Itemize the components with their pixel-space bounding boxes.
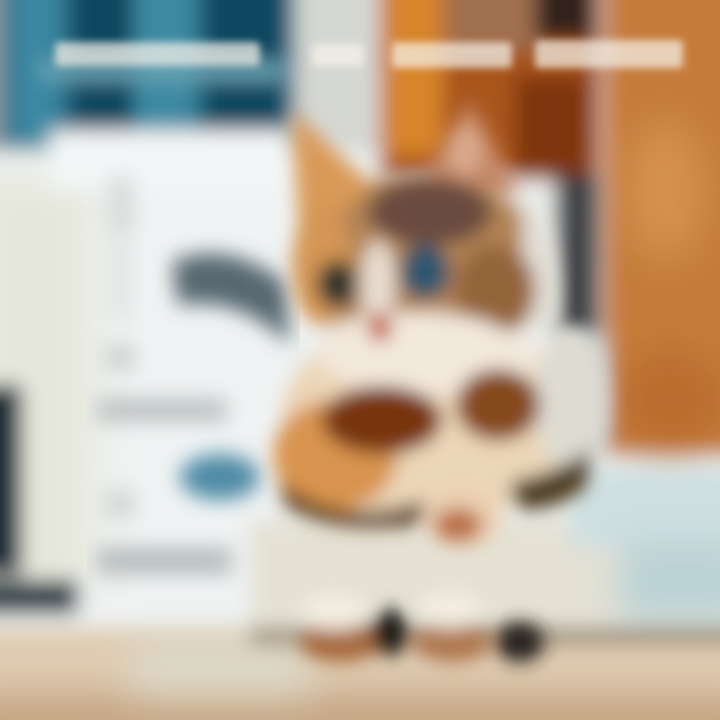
cat illustration <box>273 100 606 662</box>
floor <box>0 628 720 720</box>
nose <box>368 312 392 342</box>
brown chest patch left <box>322 386 442 454</box>
left face orange <box>292 205 352 325</box>
brown chest patch right <box>456 369 540 441</box>
left eye <box>317 260 357 308</box>
orange and brown curtain <box>380 0 600 180</box>
white bedding left <box>0 160 300 620</box>
muzzle white <box>320 312 510 368</box>
pale curtain strip <box>295 0 380 150</box>
blurred text lines <box>97 175 232 575</box>
right eye <box>400 245 450 299</box>
dark strip right of cat <box>555 175 600 335</box>
left ear <box>292 110 372 250</box>
icon: blue blob lower <box>180 454 260 500</box>
cat body <box>280 320 580 520</box>
head <box>295 175 545 355</box>
left hind foot <box>300 622 380 662</box>
wooden panel right <box>604 0 720 455</box>
dark belly stripe left <box>278 480 425 527</box>
forehead dark <box>368 178 492 246</box>
right hind foot <box>414 622 490 662</box>
right face brown <box>455 245 535 335</box>
blue check curtain <box>0 0 295 150</box>
front paw <box>425 488 501 548</box>
white right cheek fur <box>522 190 558 330</box>
left haunch orange <box>273 400 397 510</box>
right white fur <box>534 330 606 470</box>
blurred text panel <box>97 175 290 575</box>
icon: grey-blue blob upper <box>172 254 290 345</box>
leg whites <box>301 594 369 630</box>
dark belly stripe right <box>510 448 592 509</box>
right ear <box>425 100 520 195</box>
cat chest white <box>320 315 540 395</box>
blurred title text <box>55 40 683 68</box>
dark gaps between feet <box>372 609 408 655</box>
white cushion with pale blue right <box>250 520 720 630</box>
dark object far left <box>0 385 22 575</box>
